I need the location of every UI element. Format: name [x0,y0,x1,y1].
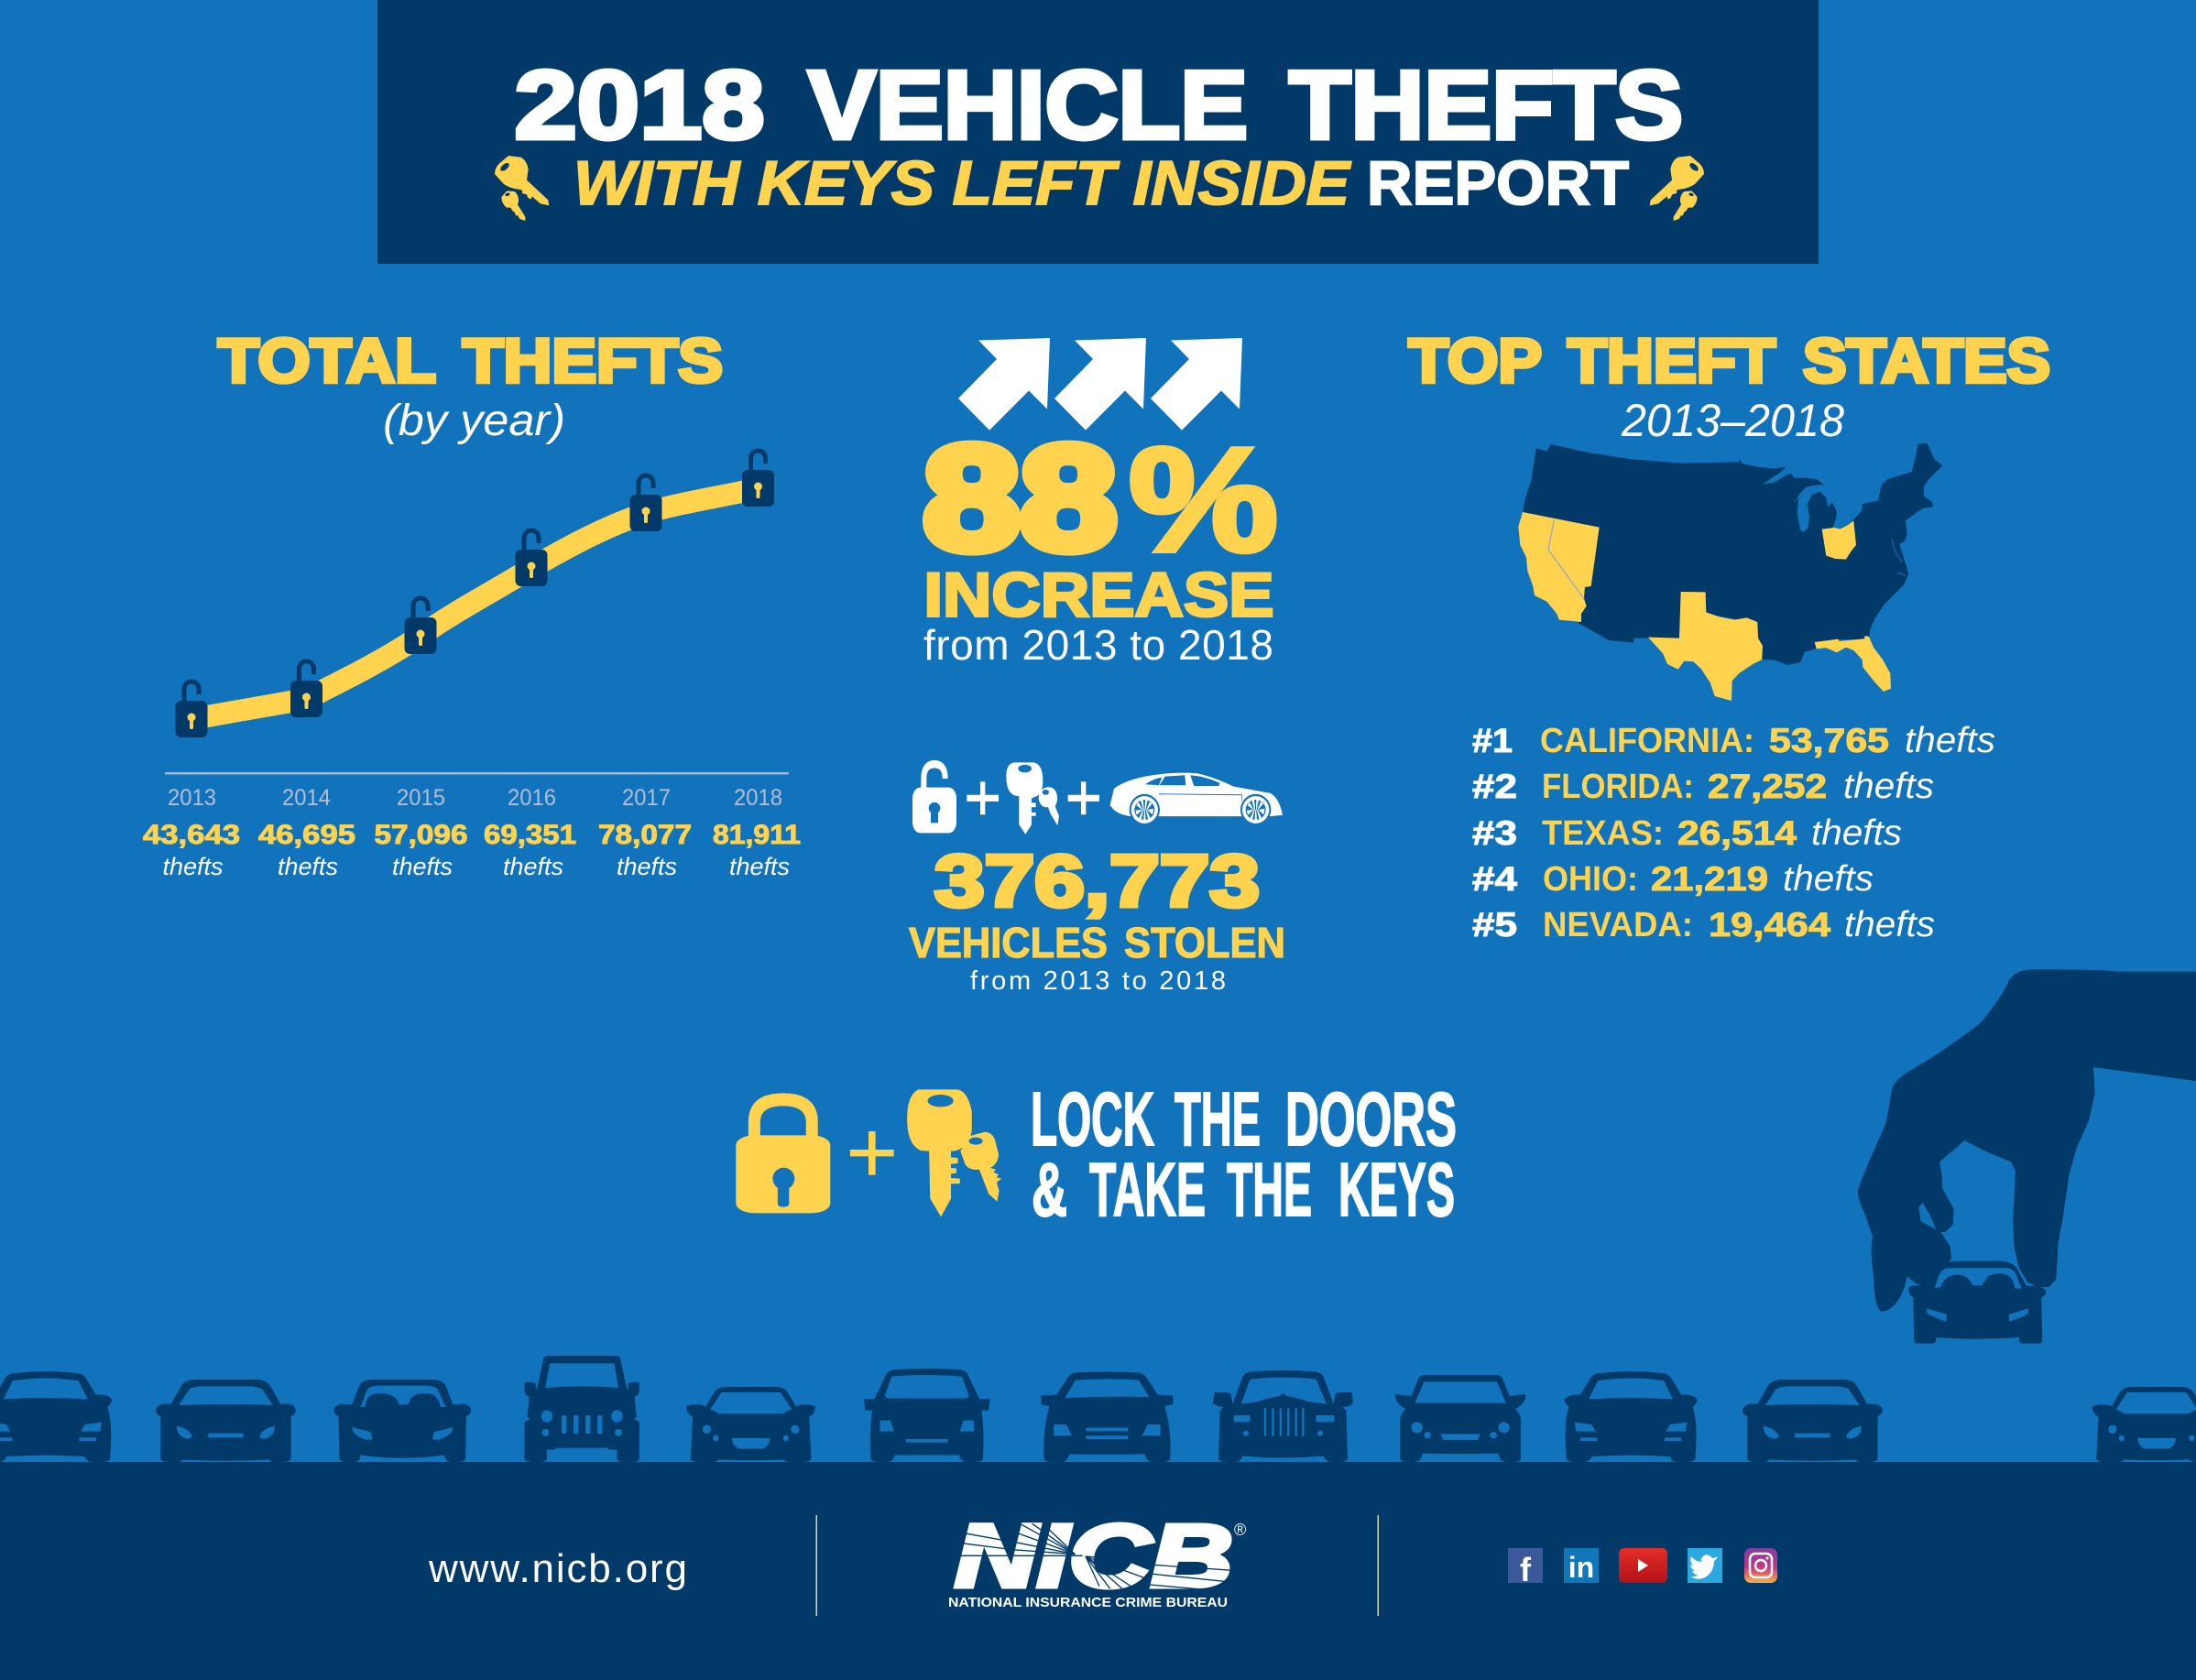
illustration: hand lifting car [1858,969,2196,1344]
ranking list [1472,721,1995,944]
icon: facebook [1508,1548,1543,1588]
map: mainland [1523,442,1943,665]
rank 3 [1472,813,1902,853]
rank 5: #5 [1472,906,1517,944]
vehicles stolen label [909,919,1285,966]
icon: instagram [1744,1548,1777,1583]
rank 1: #1 [1472,722,1513,759]
rank 4: #4 [1472,860,1518,898]
thefts captions: thefts [503,853,563,880]
year labels: 2014 [282,785,331,811]
icon: keys [1006,762,1059,835]
rank 1: 53,765 [1769,722,1889,759]
heading [1409,326,2050,396]
rank 3: thefts [1811,813,1902,853]
rank 2: FLORIDA: [1542,768,1694,806]
panel: call to action [736,1076,1457,1232]
social icons [1508,1548,1777,1588]
panel: top theft states [1409,326,2050,944]
rank 1: CALIFORNIA: [1540,722,1754,760]
rank 3: TEXAS: [1542,814,1664,853]
theft counts [143,820,801,850]
heading [218,326,723,396]
year labels [168,785,782,811]
footer band [0,1462,2196,1680]
title: THEFTS [1289,51,1683,159]
thefts captions: thefts [729,853,790,880]
big percentage: % [1129,418,1278,583]
year labels: 2016 [508,785,556,811]
year labels: 2013 [168,785,216,811]
vehicles stolen label: STOLEN [1124,919,1285,966]
plus [967,781,999,814]
car row [0,1356,2196,1462]
icon: keys left [495,156,549,221]
slogan: DOORS [1285,1076,1457,1162]
rank 4: OHIO: [1543,860,1638,899]
title: 2018 [515,51,764,159]
slogan [1031,1076,1457,1232]
heading: TOP [1409,326,1542,396]
slogan: KEYS [1338,1147,1455,1232]
year labels: 2015 [397,785,445,811]
NICB logo [948,1506,1246,1610]
icons: lock, plus and keys [736,1089,1001,1216]
theft counts: 78,077 [598,820,692,850]
rank 1 [1472,721,1995,760]
NICB logo: NICB [955,1506,1233,1606]
icon: small key [960,1132,1001,1202]
slogan: & [1032,1147,1067,1232]
icon: closed lock [736,1093,830,1213]
icon: keys right [1650,156,1704,221]
title: VEHICLE [808,51,1248,159]
rank 2: #2 [1472,768,1517,805]
rank 4 [1472,859,1874,899]
big percentage [923,416,1278,583]
subtitle yellow: WITH KEYS LEFT INSIDE [574,148,1352,218]
icon: large key [907,1089,972,1216]
theft counts: 69,351 [484,820,576,850]
rank 5 [1472,905,1935,944]
panel: total thefts [143,326,801,880]
theft counts: 46,695 [258,820,355,850]
thefts captions: thefts [617,853,677,880]
line chart [176,451,774,737]
slogan: LOCK [1031,1076,1154,1162]
theft counts: 81,911 [713,820,801,850]
map: United States [1518,442,1943,701]
rank 4: thefts [1783,859,1874,899]
thefts captions: thefts [162,853,224,880]
rank 5: NEVADA: [1543,906,1693,944]
rank 2 [1472,767,1934,806]
heading: STATES [1803,326,2050,396]
state: Texas [1648,592,1763,701]
thefts captions: thefts [392,853,453,880]
NICB logo: ® [1234,1521,1246,1539]
subtitle white: REPORT [1367,148,1629,218]
state: Florida [1815,636,1891,692]
thefts captions [162,853,790,880]
increase label: INCREASE [923,561,1273,630]
big percentage: 88 [923,416,1117,581]
icon: white car [1110,773,1283,825]
icon: three arrows [958,338,1242,431]
lifted car [1908,1261,2046,1344]
vehicles stolen label: VEHICLES [909,919,1108,966]
icon: youtube [1619,1548,1667,1583]
icon: linkedin: in [1568,1551,1594,1584]
rank 3: 26,514 [1677,814,1797,852]
year labels: 2017 [622,785,671,811]
rank 2: thefts [1843,767,1934,806]
subheading: (by year) [383,397,565,445]
state: Ohio [1822,520,1856,560]
rank 3: #3 [1472,814,1517,852]
panel: increase stat [923,338,1278,669]
slogan: TAKE [1089,1147,1206,1232]
icon: open lock [912,764,956,833]
total count: 376,773 [934,840,1260,922]
state: California and Nevada [1518,512,1600,622]
slogan: THE [1227,1147,1312,1232]
plus [850,1131,894,1175]
panel: vehicles stolen [909,762,1285,996]
icon: linkedin [1564,1548,1599,1584]
hand [1858,969,2196,1312]
heading: THEFT [1568,326,1775,396]
date range: from 2013 to 2018 [923,621,1273,669]
rank 2: 27,252 [1708,768,1827,805]
icon row: lock plus keys plus car [912,762,1283,835]
icon: facebook: f [1520,1551,1532,1588]
heading: THEFTS [463,326,723,396]
rank 1: thefts [1905,721,1995,760]
year labels: 2018 [734,785,782,811]
rank 4: 21,219 [1651,860,1768,898]
slogan: THE [1174,1076,1261,1162]
heading: TOTAL [218,326,436,396]
header banner [377,0,1819,264]
icon: twitter [1688,1548,1722,1583]
thefts captions: thefts [278,853,338,880]
rank 5: 19,464 [1709,906,1830,944]
rank 5: thefts [1844,905,1935,944]
website: www.nicb.org [428,1546,687,1591]
date range: from 2013 to 2018 [970,966,1226,996]
subheading: 2013–2018 [1621,395,1844,446]
theft counts: 43,643 [143,820,240,850]
plus [1068,781,1099,814]
theft counts: 57,096 [374,820,467,850]
NICB logo: NATIONAL INSURANCE CRIME BUREAU [948,1595,1228,1610]
title [515,51,1683,159]
